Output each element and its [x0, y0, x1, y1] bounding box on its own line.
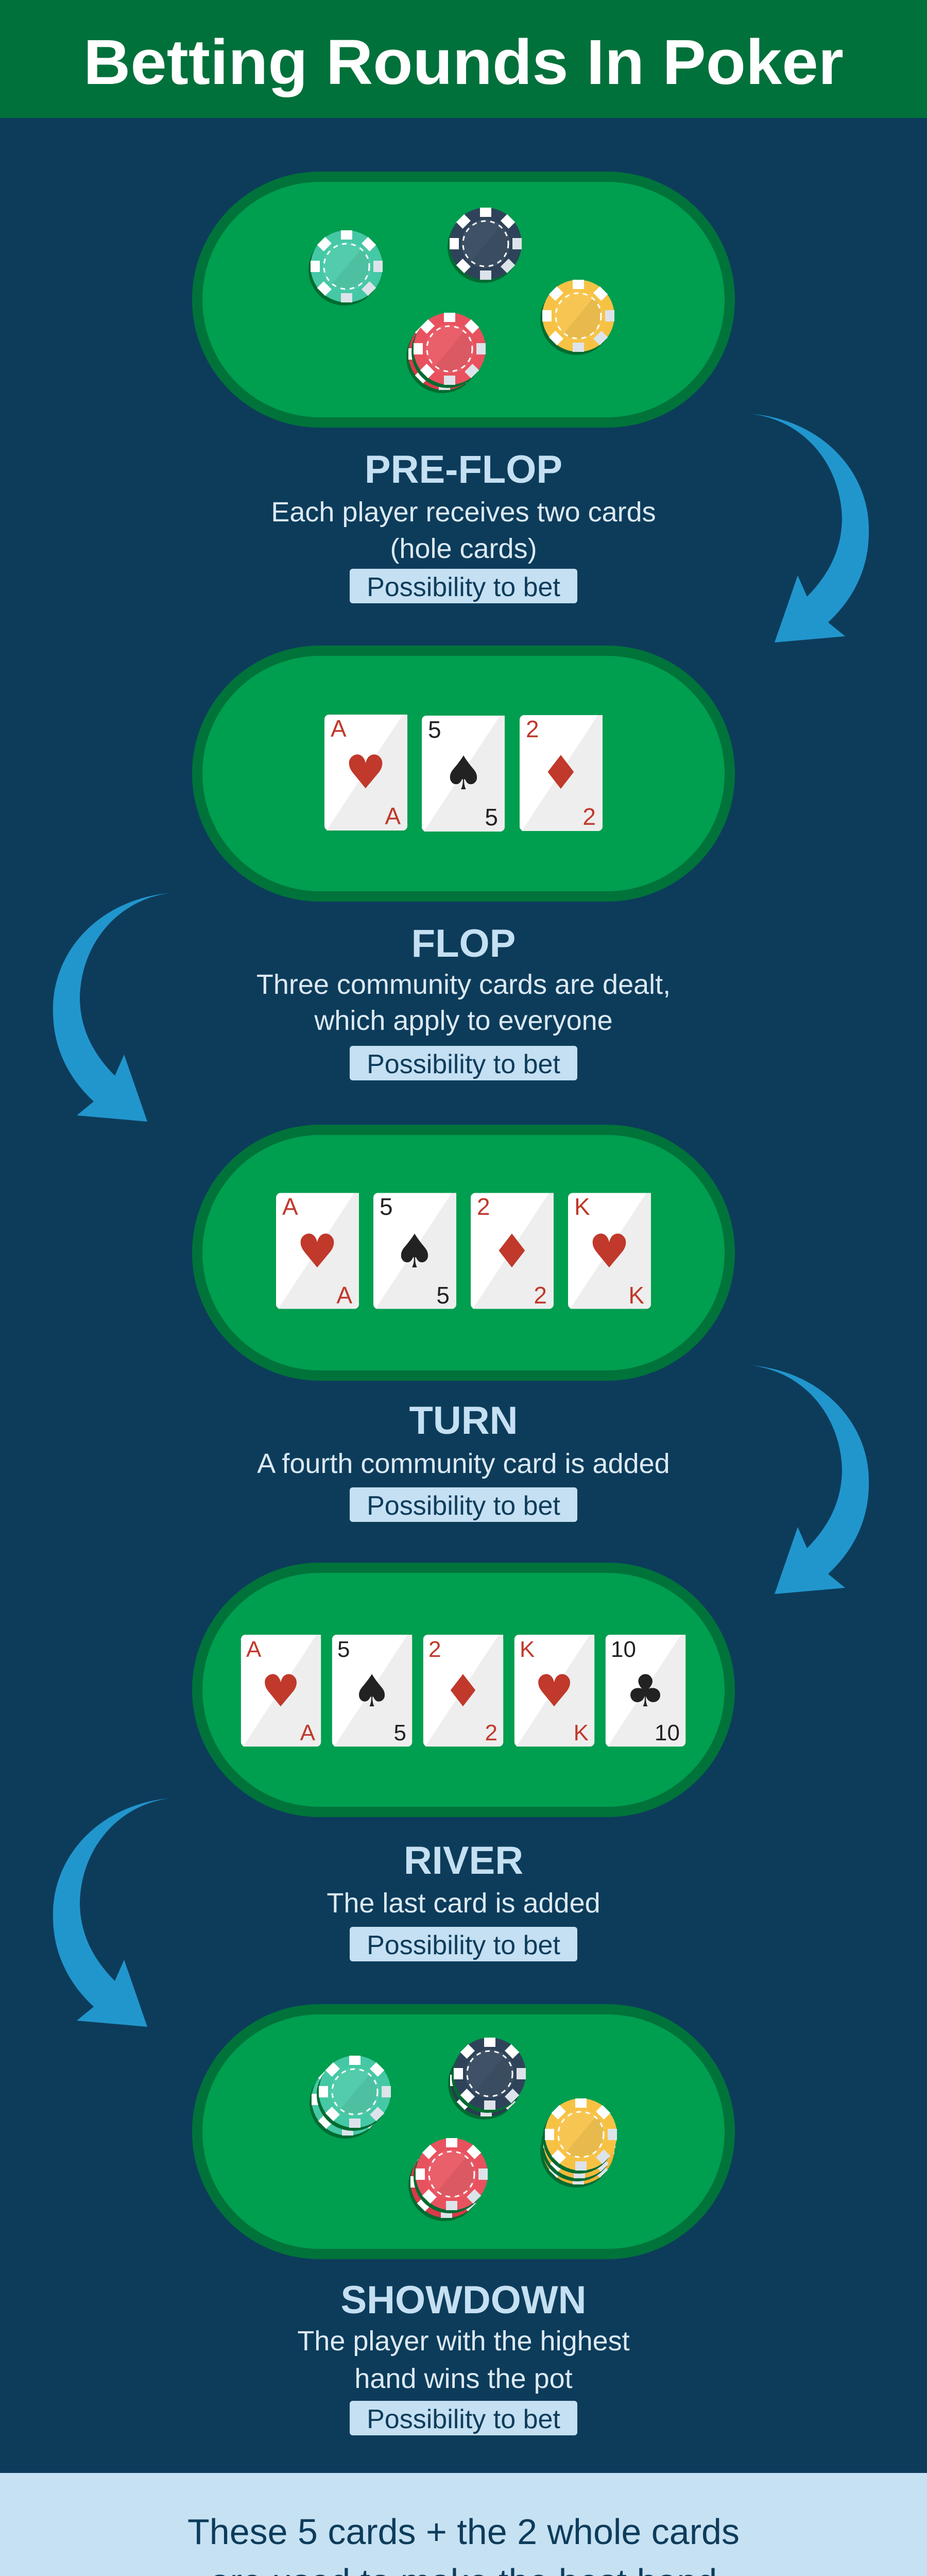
cards: river: ♥ [534, 1666, 574, 1717]
cards: flop: 5 [485, 804, 498, 831]
arrow: flop to turn [53, 893, 171, 1122]
cards: flop: A [331, 715, 347, 742]
cards: river: 5 [337, 1637, 350, 1662]
text block: river [327, 1839, 600, 1961]
cards: turn: 5 [436, 1282, 450, 1309]
cards: turn: K [628, 1282, 644, 1309]
cards: turn: 2 [534, 1282, 547, 1309]
cards: river: A [246, 1637, 262, 1662]
cards: turn: ♠ [394, 1225, 435, 1279]
text block: flop [256, 922, 671, 1080]
cards: flop: A [385, 803, 401, 829]
text block: flop: which apply to everyone [314, 1005, 613, 1036]
panel: flop table [192, 646, 735, 902]
cards: river: A [300, 1720, 316, 1745]
text block: river: RIVER [404, 1839, 523, 1883]
cards: turn: ♦ [491, 1225, 533, 1279]
text block: flop: Three community cards are dealt, [256, 969, 671, 1000]
text block: showdown: The player with the highest [297, 2326, 630, 2357]
cards: river: 2 [485, 1720, 497, 1745]
icon: chip stacks [310, 2038, 617, 2221]
cards: river: ♦ [443, 1666, 483, 1717]
cards: river: 10 [611, 1637, 636, 1662]
cards: turn [276, 1193, 651, 1309]
panel: showdown table [192, 2004, 735, 2259]
text block: pre-flop: PRE-FLOP [365, 448, 562, 492]
text block: showdown [297, 2278, 630, 2435]
text block: turn: Possibility to bet [367, 1491, 560, 1521]
cards: river: 2 [428, 1637, 441, 1662]
cards: flop: 2 [526, 716, 539, 742]
cards: flop: ♦ [540, 746, 581, 800]
arrow: turn to river [750, 1365, 869, 1594]
cards: flop: 2 [582, 803, 596, 830]
icon: chips [308, 208, 614, 393]
text block: river: The last card is added [327, 1888, 600, 1919]
text block: flop: Possibility to bet [367, 1049, 560, 1079]
text block: showdown: SHOWDOWN [340, 2278, 587, 2322]
arrow: river to showdown [53, 1798, 171, 2027]
cards: turn: 5 [380, 1193, 393, 1220]
text block: showdown: Possibility to bet [367, 2404, 560, 2434]
text block: pre-flop: Each player receives two cards [271, 497, 656, 528]
footer note [0, 2473, 927, 2576]
text block: showdown: hand wins the pot [354, 2363, 573, 2394]
cards: turn: A [282, 1193, 298, 1220]
text block: pre-flop [271, 448, 656, 603]
text block: turn: A fourth community card is added [257, 1448, 670, 1479]
title: Betting Rounds In Poker [83, 27, 844, 98]
text block: pre-flop: Possibility to bet [367, 572, 560, 602]
cards: river: ♥ [261, 1666, 301, 1717]
text block: pre-flop: (hole cards) [390, 533, 537, 564]
cards: turn: K [574, 1193, 590, 1220]
cards: river: K [520, 1637, 535, 1662]
panel: turn table [192, 1125, 735, 1381]
text block: turn: TURN [409, 1399, 518, 1443]
cards: river: ♠ [352, 1666, 392, 1717]
cards: flop: ♠ [443, 747, 484, 801]
cards: turn: A [336, 1282, 352, 1309]
cards: turn: ♥ [297, 1225, 338, 1279]
footer note: These 5 cards + the 2 whole cards [187, 2512, 740, 2552]
cards: turn: ♥ [589, 1225, 630, 1279]
cards: river: K [574, 1720, 589, 1745]
text block: river: Possibility to bet [367, 1930, 560, 1960]
cards: flop: 5 [428, 716, 441, 743]
panel: pre-flop table [192, 172, 735, 428]
cards: river [241, 1635, 685, 1747]
cards: river: 5 [394, 1720, 406, 1745]
text block: flop: FLOP [411, 922, 516, 965]
text block: turn [257, 1399, 670, 1522]
cards: river: 10 [655, 1720, 680, 1745]
cards: flop: ♥ [345, 745, 386, 800]
cards: flop [324, 715, 603, 832]
cards: river: ♣ [625, 1666, 665, 1717]
panel: river table [192, 1563, 735, 1817]
cards: turn: 2 [477, 1193, 490, 1220]
arrow: pre-flop to flop [750, 414, 869, 642]
header bar [0, 0, 927, 118]
